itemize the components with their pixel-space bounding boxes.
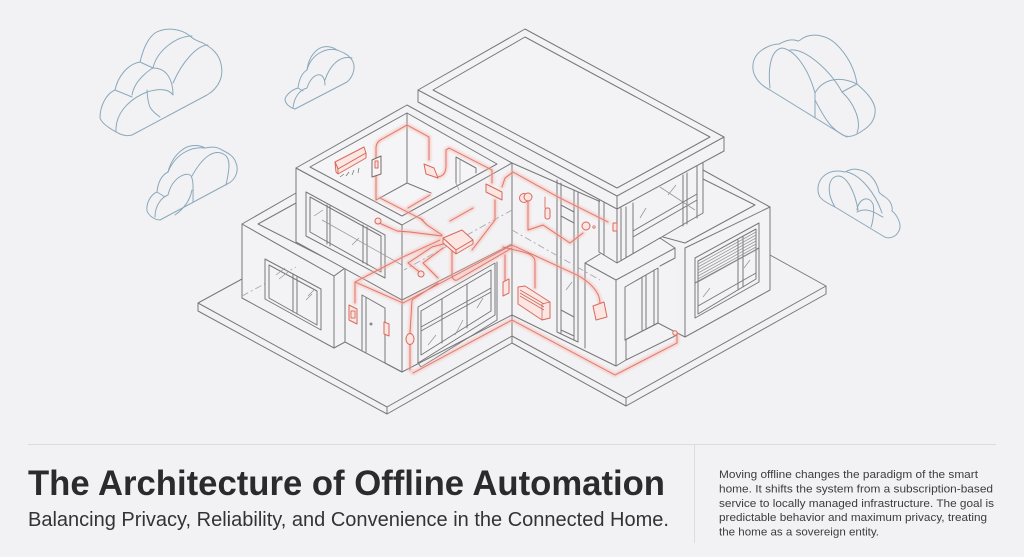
device: sensor [424,164,438,178]
icon: cloud left middle [147,146,237,220]
title: The Architecture of Offline Automation [28,464,665,503]
ground platform [198,255,826,414]
description text block: predictable behavior and maximum privacy, treating [719,512,987,524]
wiring lines [355,125,677,375]
upper right glazed block [599,155,703,263]
central facade [404,163,617,366]
lower right entry volume [585,238,685,366]
device: wall air conditioner [335,147,366,177]
upper room block [296,105,512,372]
device: camera [520,193,532,202]
lower entrance facade [345,268,402,372]
subtitle: Balancing Privacy, Reliability, and Convenience in the Connected Home. [28,509,669,531]
right wing [663,170,770,337]
device: window tag [613,223,617,231]
left wing wall [242,193,345,348]
device: central hub [443,230,473,254]
description text block [719,469,994,538]
window: upper right [621,166,697,260]
window: ground floor [418,262,497,367]
device: entry sensor [406,334,414,344]
device: node left [375,218,381,224]
description text block: service to locally managed infrastructure. The goal is [719,498,994,510]
red wiring network [335,125,677,375]
icon: large cloud top left [100,29,222,136]
device: smart node [582,222,595,230]
description text block: Moving offline changes the paradigm of the smart [719,469,979,481]
device: pendant sensor [545,208,550,219]
window: left wing [265,259,321,330]
device: room panel right [593,302,607,320]
device: door keypad [384,322,389,336]
icon: small cloud right [818,169,900,238]
device: node centre [418,271,424,277]
device: outdoor node [673,331,677,335]
device: room switch [372,156,381,177]
divider [28,444,996,543]
device: wall heater [518,286,550,320]
window: rolling shutter [695,223,759,318]
house illustration [198,29,826,414]
device: hall panel [349,305,357,324]
wiring glow [355,125,677,375]
icon: large cloud top right [753,35,875,137]
description text block: home. It shifts the system from a subscription-based [719,484,993,496]
device: wall tag [503,279,509,296]
description text block: the home as a sovereign entity. [719,526,879,538]
icon: small cloud top centre [285,47,354,109]
ground floor main wall and window [402,244,512,372]
main roof slab [418,29,724,209]
window: upper room [306,192,402,278]
device: thermostat [486,184,502,200]
